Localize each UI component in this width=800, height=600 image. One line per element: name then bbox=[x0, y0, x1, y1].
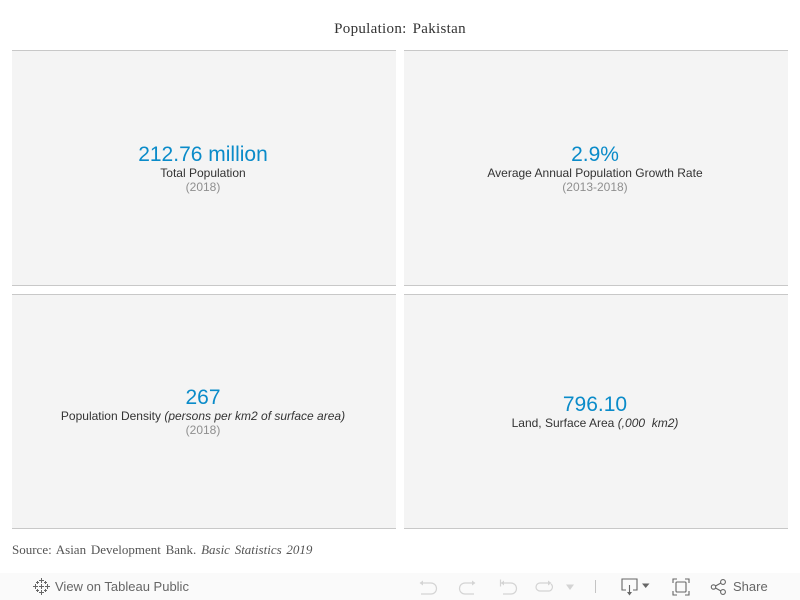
icon: fullscreen bbox=[672, 578, 690, 596]
label: total population: Total Population bbox=[160, 166, 246, 180]
title: Population: Pakistan bbox=[334, 21, 466, 37]
panel: total population bbox=[12, 50, 396, 286]
value: total population: 212.76 million bbox=[138, 143, 268, 166]
icon: download bbox=[621, 578, 650, 596]
icon: share bbox=[710, 579, 726, 595]
icon: pause dropdown arrow bbox=[566, 584, 574, 590]
icon: refresh bbox=[536, 580, 553, 592]
source note: Source: Asian Development Bank. Basic Statistics 2019 bbox=[12, 542, 312, 557]
icon: revert bbox=[500, 580, 517, 595]
year: growth rate: (2013-2018) bbox=[562, 180, 628, 194]
toolbar separator bbox=[595, 580, 596, 593]
label: growth rate: Average Annual Population Growth Rate bbox=[487, 166, 703, 180]
value: growth rate: 2.9% bbox=[571, 143, 619, 166]
label: population density: Population Density (persons per km2 of surface area) bbox=[61, 409, 345, 423]
year: total population: (2018) bbox=[186, 180, 220, 194]
toolbar bbox=[0, 573, 800, 600]
value: land area: 796.10 bbox=[563, 393, 627, 416]
year: population density: (2018) bbox=[186, 423, 220, 437]
icon: redo bbox=[459, 580, 476, 595]
link: view on tableau public: View on Tableau Public bbox=[55, 579, 189, 594]
panel: growth rate bbox=[404, 50, 788, 286]
value: population density: 267 bbox=[185, 386, 221, 409]
panel: population density bbox=[12, 294, 396, 529]
link: share: Share bbox=[733, 579, 768, 594]
panel: land area bbox=[404, 294, 788, 529]
label: land area: Land, Surface Area (,000 km2) bbox=[512, 416, 678, 430]
icon: undo bbox=[420, 580, 437, 595]
icon: tableau logo bbox=[33, 578, 50, 595]
